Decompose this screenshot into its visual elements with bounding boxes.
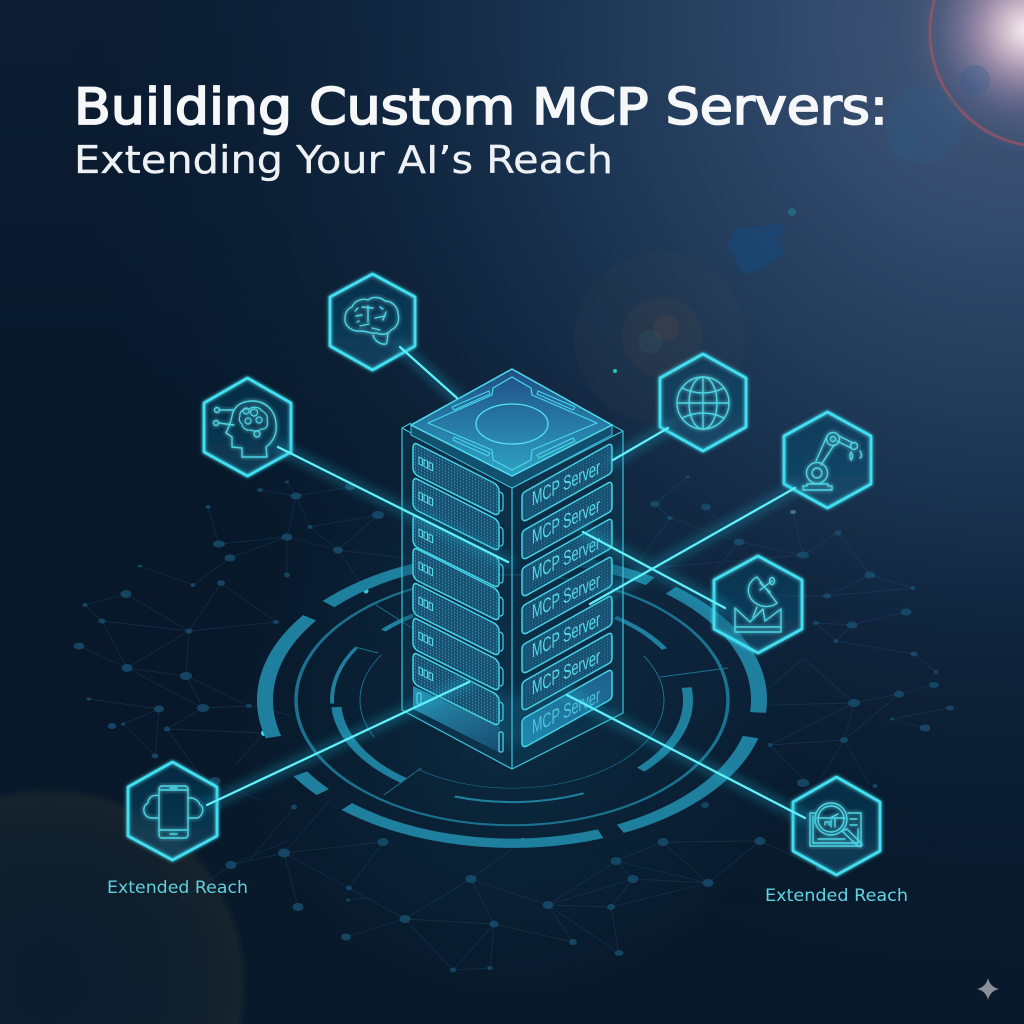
- top plate: [411, 369, 612, 488]
- line: brain to tower: [400, 347, 457, 398]
- line: robot arm to tower: [590, 488, 795, 604]
- hexagon icon: satellite dish: [714, 556, 802, 653]
- hexagon icon: globe: [660, 354, 746, 451]
- hexagon icon: magnifier over report: [793, 777, 880, 875]
- caption: right extended reach: Extended Reach: [765, 886, 908, 905]
- right rack panels with labels: MCP Server: [532, 608, 600, 663]
- right rack panels with labels: MCP Server: [532, 456, 600, 511]
- line: dish to tower: [583, 532, 725, 608]
- glass enclosure: [402, 423, 623, 769]
- hexagon icon: brain: [330, 274, 415, 370]
- line: globe to tower: [613, 428, 668, 460]
- right rack panels with labels: MCP Server: [532, 531, 600, 586]
- line: AI head to tower: [278, 447, 508, 562]
- title: Extending Your AI’s Reach: [74, 138, 613, 182]
- left rack panels: [413, 444, 503, 753]
- network of nodes: [74, 476, 954, 972]
- hexagon icon: AI head: [204, 378, 291, 476]
- right rack panels with labels: MCP Server: [532, 645, 600, 700]
- right rack panels with labels: MCP Server: [532, 684, 600, 739]
- hexagon icon: phone and cloud: [128, 762, 217, 860]
- concentric rings under the server: [163, 498, 861, 902]
- server tower: [402, 369, 623, 769]
- right rack panels with labels: MCP Server: [532, 569, 600, 624]
- caption: left extended reach: Extended Reach: [107, 878, 248, 897]
- connector lines: [207, 347, 805, 818]
- icon: sparkle watermark: [977, 978, 999, 1000]
- title: [74, 78, 888, 182]
- line: phone to tower: [207, 682, 469, 805]
- right rack panels with labels: MCP Server: [532, 494, 600, 549]
- right rack panels with labels: [522, 444, 612, 747]
- title: Building Custom MCP Servers:: [74, 78, 888, 136]
- lens flare: top right: [574, 0, 1024, 424]
- hexagon icon: robot arm: [784, 412, 871, 508]
- line: magnifier to tower: [567, 695, 805, 818]
